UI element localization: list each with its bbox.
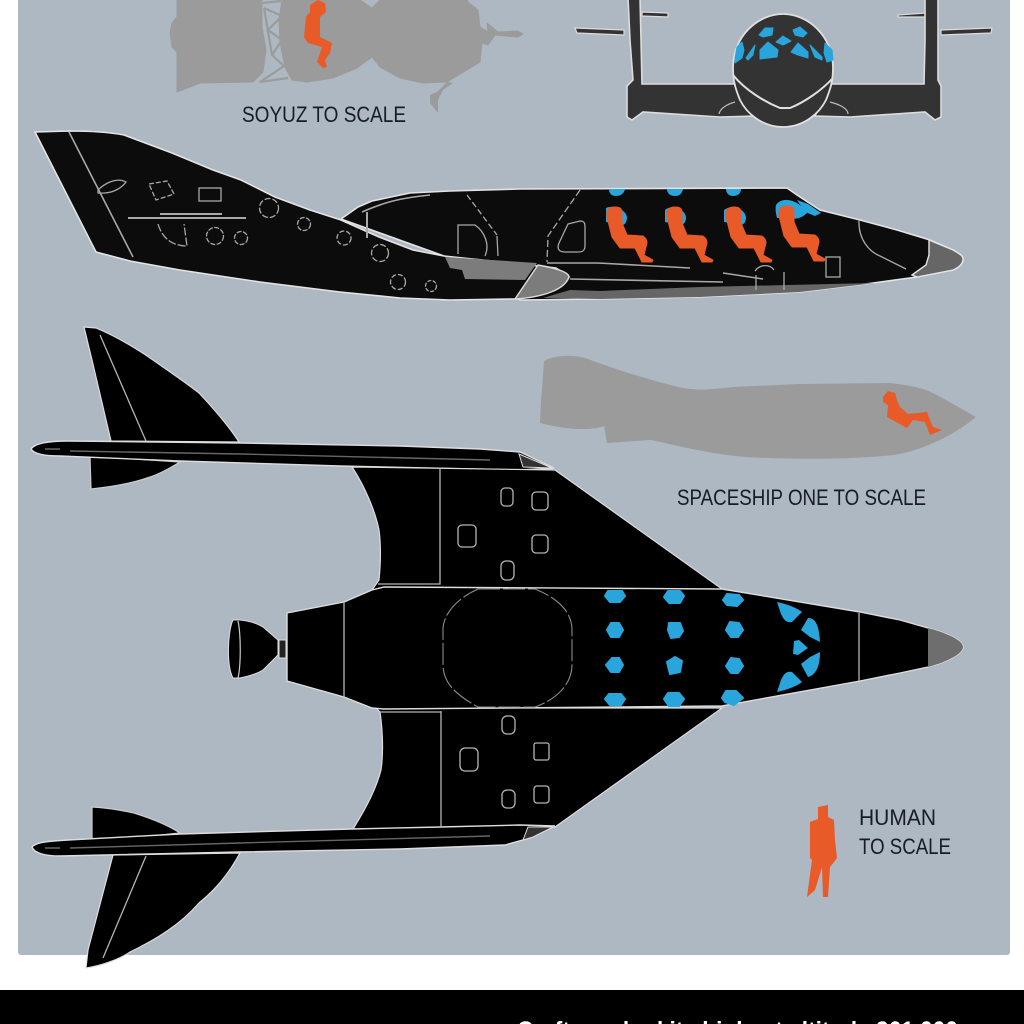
- side view tail and wing: [35, 131, 569, 300]
- side view main pod: [515, 265, 569, 299]
- upper small fin: [90, 456, 180, 489]
- front view fins: [575, 12, 992, 35]
- rocket engine: [228, 620, 286, 678]
- SpaceShipOne label: SPACESHIP ONE TO SCALE: [677, 485, 926, 510]
- human figure: [807, 805, 837, 897]
- lower small fin: [92, 807, 180, 842]
- top view panel lines: [100, 335, 859, 958]
- front view landing fairings: [719, 102, 848, 114]
- front view windows: [735, 27, 833, 63]
- top view windows: [605, 591, 743, 706]
- front view fuselage: [733, 14, 833, 127]
- front view booms and wing: [627, 0, 941, 120]
- side view nose window: [797, 200, 821, 216]
- footer band: [0, 990, 1024, 1024]
- SpaceShipOne pilot: [883, 391, 942, 435]
- Soyuz silhouette: [170, 0, 523, 92]
- lower wing: [353, 708, 722, 829]
- seated crew figures: [607, 206, 825, 262]
- engine nozzle lip: [238, 621, 240, 678]
- front view canopy line: [733, 75, 833, 108]
- Soyuz label: SOYUZ TO SCALE: [242, 102, 406, 127]
- human label: HUMAN: [859, 805, 936, 830]
- side view windows: [609, 189, 741, 196]
- Soyuz to scale: [170, 0, 523, 127]
- SpaceShipOne to scale: [540, 356, 976, 510]
- engine connector: [279, 640, 286, 658]
- upper boom: [31, 441, 554, 470]
- scale label: TO SCALE: [859, 834, 951, 859]
- nose cone: [928, 628, 963, 667]
- upper wing: [352, 467, 722, 590]
- side view wing fairing: [445, 257, 537, 280]
- engine nozzle: [228, 620, 278, 678]
- front view craft: [575, 0, 992, 127]
- lower boom: [32, 825, 555, 856]
- footer background: [0, 990, 1024, 1024]
- boom tip details: [519, 454, 553, 840]
- upper tail fin: [84, 327, 239, 442]
- nose windows: [777, 602, 820, 692]
- fuselage: [287, 587, 963, 709]
- Soyuz antenna: [430, 82, 453, 113]
- upper boom details: [45, 449, 490, 460]
- Soyuz truss: [260, 1, 288, 82]
- side view nose cone: [912, 240, 963, 277]
- lower tail fin: [86, 853, 240, 968]
- SpaceShipOne silhouette: [540, 356, 976, 459]
- lower boom details: [45, 836, 490, 848]
- side view belly strip: [543, 283, 875, 299]
- side view craft: [35, 131, 963, 300]
- side view seat windows: [606, 200, 807, 225]
- human to scale: [807, 805, 951, 897]
- side view panel lines: [69, 132, 906, 292]
- side view fuselage: [341, 188, 963, 300]
- Soyuz crew figure: [304, 0, 332, 68]
- top view craft: [31, 327, 963, 968]
